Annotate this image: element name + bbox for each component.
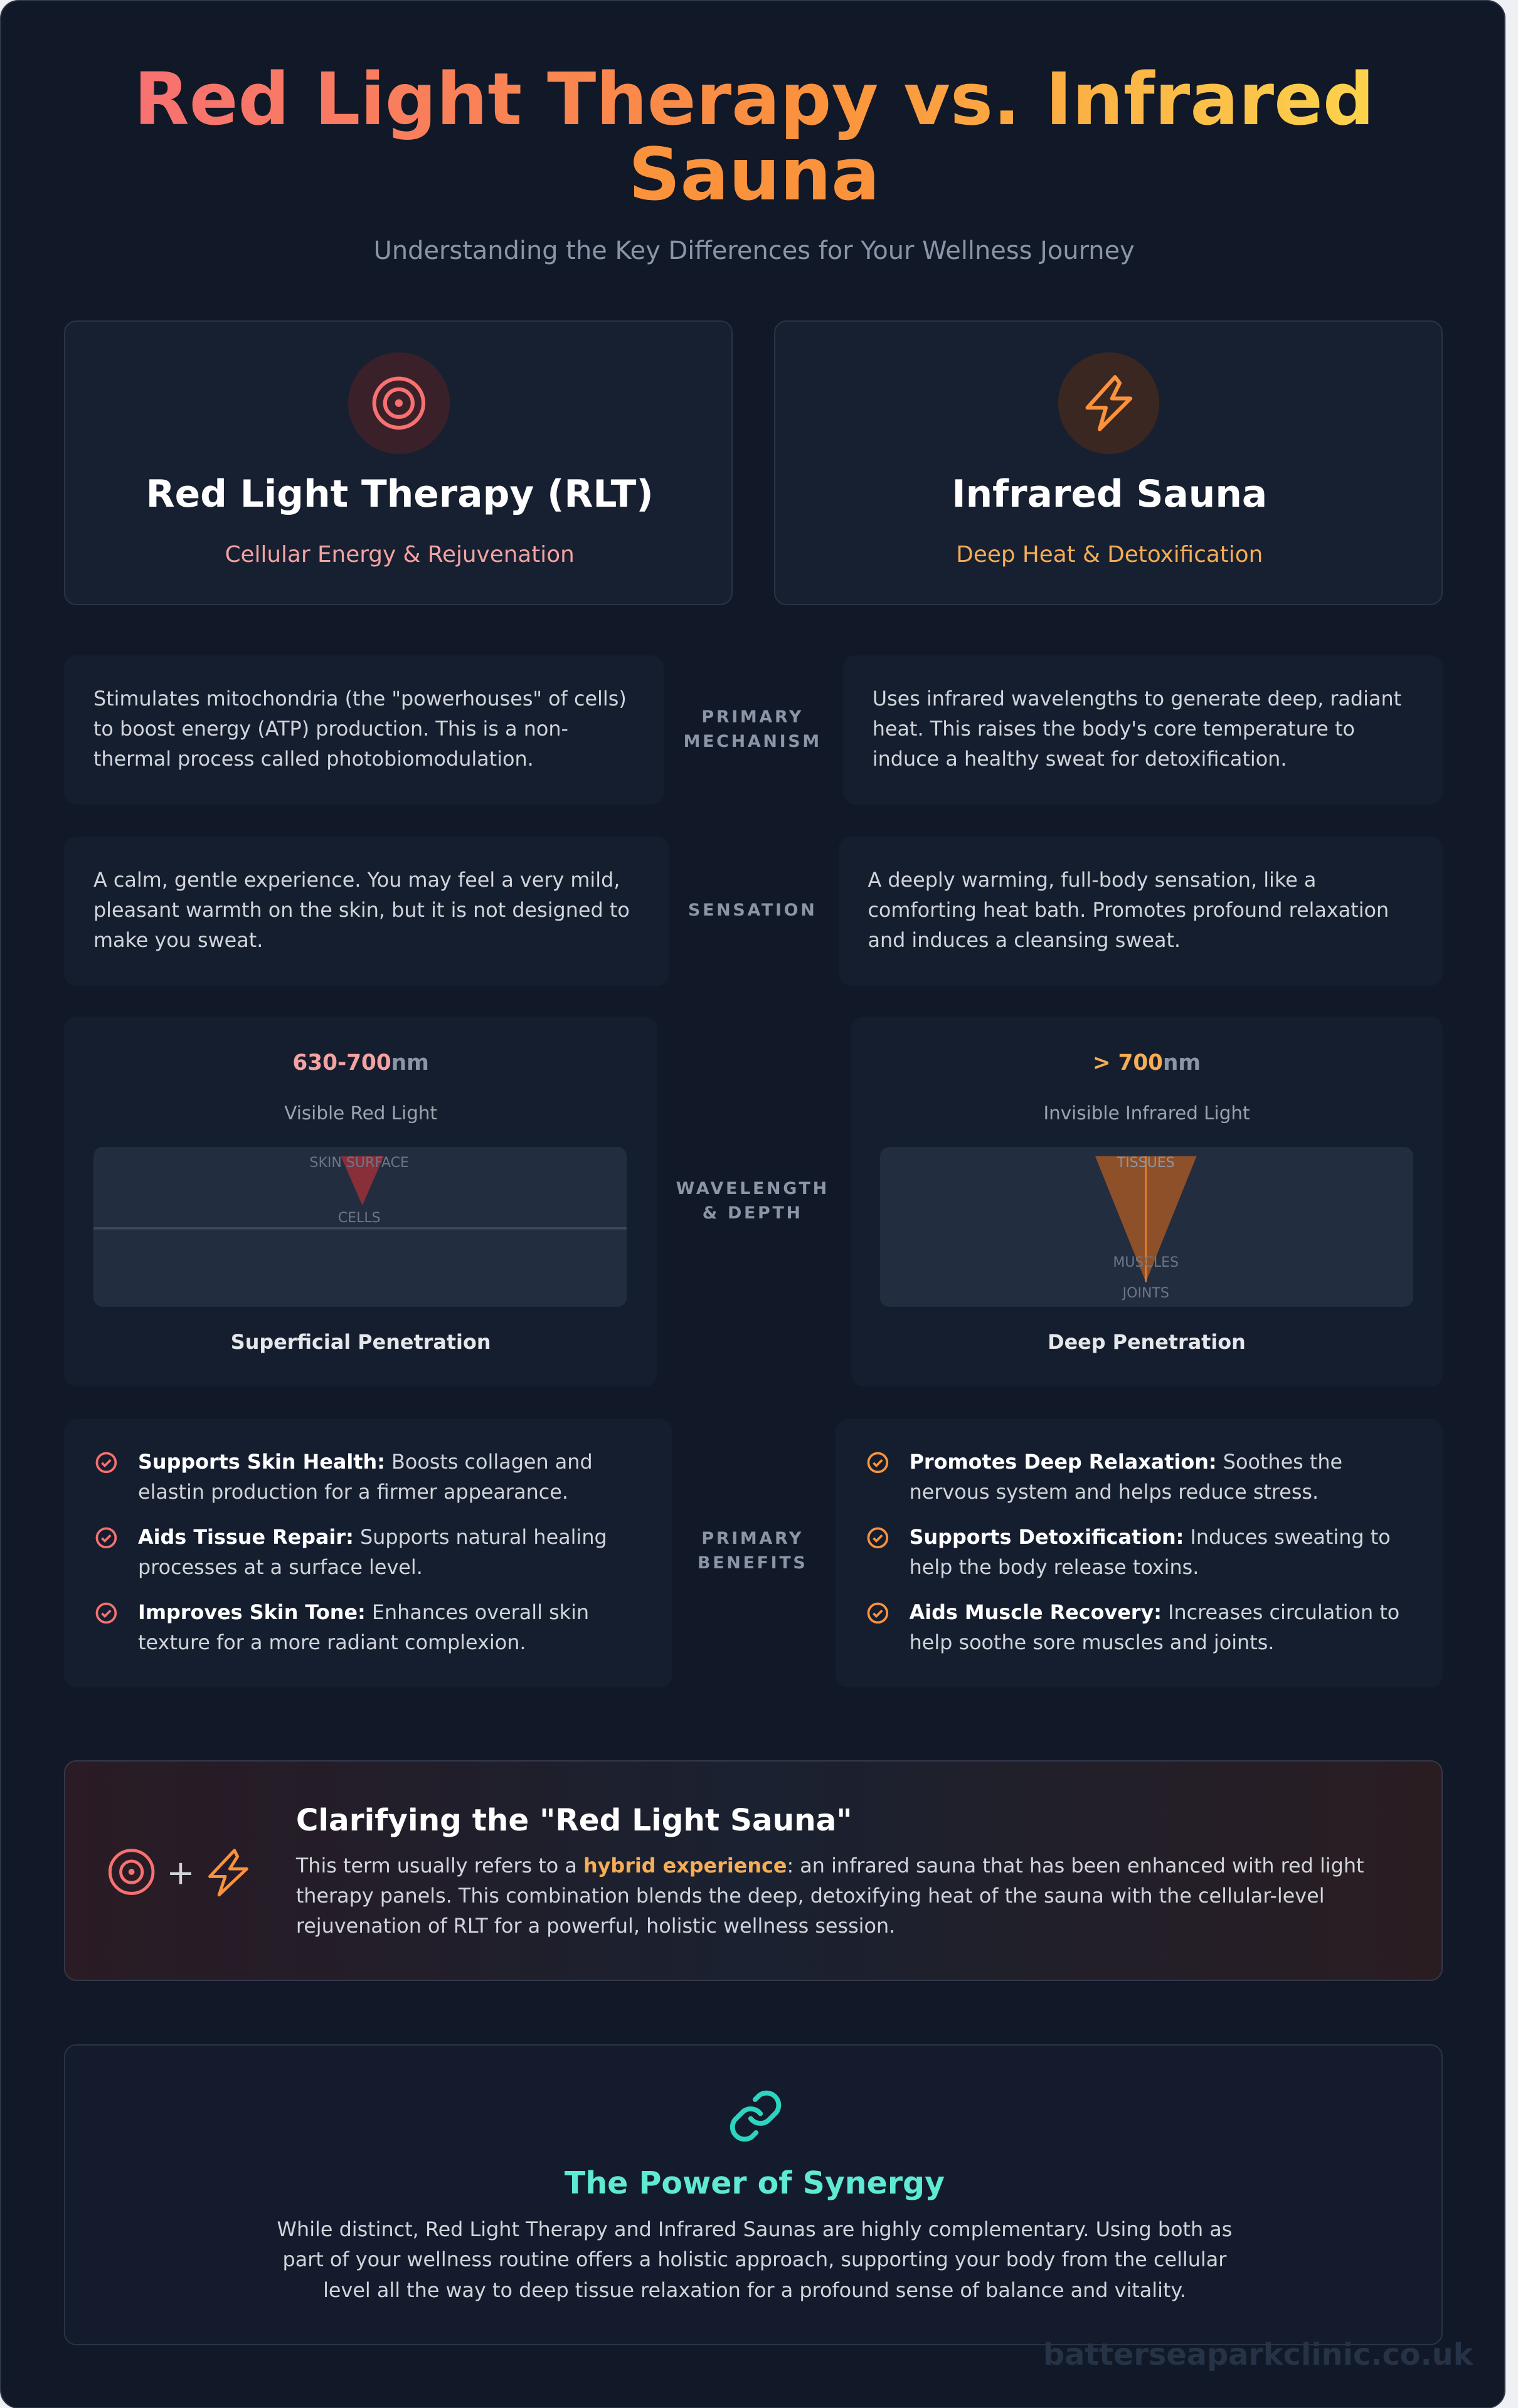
panel: benefits right xyxy=(836,1419,1443,1687)
subtitle: Understanding the Key Differences for Your Wellness Journey xyxy=(374,236,1135,265)
label: primary mechanism: MECHANISM xyxy=(684,732,822,751)
panel: benefits left: Supports Skin Health: Boosts collagen and elastin production for a firmer appearance. xyxy=(138,1450,593,1504)
panel: hybrid callout xyxy=(64,1760,1443,1981)
row: sensation left xyxy=(64,837,669,986)
diagram: superficial: CELLS xyxy=(338,1210,381,1226)
panel: benefits right: Aids Muscle Recovery: Increases circulation to help soothe sore muscles and joints. xyxy=(910,1600,1399,1654)
panel: wavelength left xyxy=(64,1017,657,1386)
panel: RLT header xyxy=(64,320,733,605)
label: primary mechanism xyxy=(684,707,822,751)
subheading: Cellular Energy & Rejuvenation xyxy=(225,542,575,568)
heading: Infrared Sauna xyxy=(952,473,1267,515)
watermark: batterseaparkclinic.co.uk xyxy=(1043,2338,1473,2372)
icon: target plus lightning xyxy=(108,1849,248,1896)
row: mechanism left: Stimulates mitochondria (the "powerhouses" of cells) to boost energy (ATP) production. This is a non-thermal process called photobiomodulation. xyxy=(93,687,627,771)
panel: wavelength right: Invisible Infrared Light xyxy=(1043,1102,1250,1124)
diagram: superficial: SKIN SURFACE xyxy=(309,1155,409,1171)
icon: target plus lightning: + xyxy=(167,1852,195,1892)
panel: wavelength right: > 700nm xyxy=(1093,1050,1201,1075)
text: While distinct, Red Light Therapy and Infrared Saunas are highly complementary. Using both as part of your wellness routine offers a holistic approach, supporting your body from the cellular level all the way to deep tissue relaxation for a profound sense of balance and vitality. xyxy=(277,2217,1232,2302)
label: benefits: BENEFITS xyxy=(698,1553,807,1573)
label: wavelength: WAVELENGTH xyxy=(676,1179,829,1198)
diagram: deep xyxy=(880,1147,1413,1307)
label: wavelength: & DEPTH xyxy=(703,1203,803,1223)
diagram: deep: TISSUES xyxy=(1117,1155,1175,1171)
panel: Sauna header xyxy=(774,320,1443,605)
panel: wavelength right xyxy=(851,1017,1443,1386)
panel: benefits left: Improves Skin Tone: Enhances overall skin texture for a more radiant complexion. xyxy=(138,1600,589,1654)
panel: wavelength right: Deep Penetration xyxy=(1048,1330,1246,1354)
panel: wavelength left: 630-700nm xyxy=(292,1050,429,1075)
panel: benefits left xyxy=(64,1419,672,1687)
panel: synergy xyxy=(64,2044,1443,2345)
panel: wavelength left: Visible Red Light xyxy=(284,1102,437,1124)
heading: Red Light Therapy (RLT) xyxy=(146,473,654,515)
label: primary mechanism: PRIMARY xyxy=(701,707,804,727)
icon: link xyxy=(730,2091,782,2142)
row: sensation right: A deeply warming, full-body sensation, like a comforting heat bath. Promotes profound relaxation and induces a cleansing sweat. xyxy=(868,868,1389,952)
label: sensation: SENSATION xyxy=(688,900,817,920)
panel: benefits right: Supports Detoxification: Induces sweating to help the body release toxins. xyxy=(910,1525,1391,1579)
diagram: deep: MUSCLES xyxy=(1113,1255,1179,1270)
icon: lightning xyxy=(1058,352,1159,454)
label: wavelength xyxy=(676,1179,829,1223)
heading: The Power of Synergy xyxy=(565,2165,945,2201)
label: benefits: PRIMARY xyxy=(701,1529,804,1548)
text: This term usually refers to a hybrid experience: an infrared sauna that has been enhanced with red light therapy panels. This combination blends the deep, detoxifying heat of the sauna with the cellular-level rejuvenation of RLT for a powerful, holistic wellness session. xyxy=(296,1854,1364,1938)
title: Red Light Therapy vs. Infrared xyxy=(134,58,1374,142)
diagram: superficial xyxy=(93,1147,627,1307)
label: benefits xyxy=(698,1529,807,1573)
row: mechanism right xyxy=(843,655,1443,805)
row: sensation left: A calm, gentle experience. You may feel a very mild, pleasant warmth on the skin, but it is not designed to make you sweat. xyxy=(93,868,630,952)
panel: benefits left: Aids Tissue Repair: Supports natural healing processes at a surface level. xyxy=(138,1525,607,1579)
row: mechanism left xyxy=(64,655,664,805)
panel: wavelength left: Superficial Penetration xyxy=(231,1330,491,1354)
subheading: Deep Heat & Detoxification xyxy=(956,542,1263,568)
heading: Clarifying the "Red Light Sauna" xyxy=(296,1803,852,1838)
row: mechanism right: Uses infrared wavelengths to generate deep, radiant heat. This raises the body's core temperature to induce a healthy sweat for detoxification. xyxy=(873,687,1401,771)
icon: target xyxy=(348,352,450,454)
title: Sauna xyxy=(629,134,879,217)
title xyxy=(134,58,1374,217)
panel: benefits right: Promotes Deep Relaxation: Soothes the nervous system and helps reduce stress. xyxy=(910,1450,1342,1504)
diagram: deep: JOINTS xyxy=(1122,1286,1169,1301)
row: sensation right xyxy=(839,837,1443,986)
